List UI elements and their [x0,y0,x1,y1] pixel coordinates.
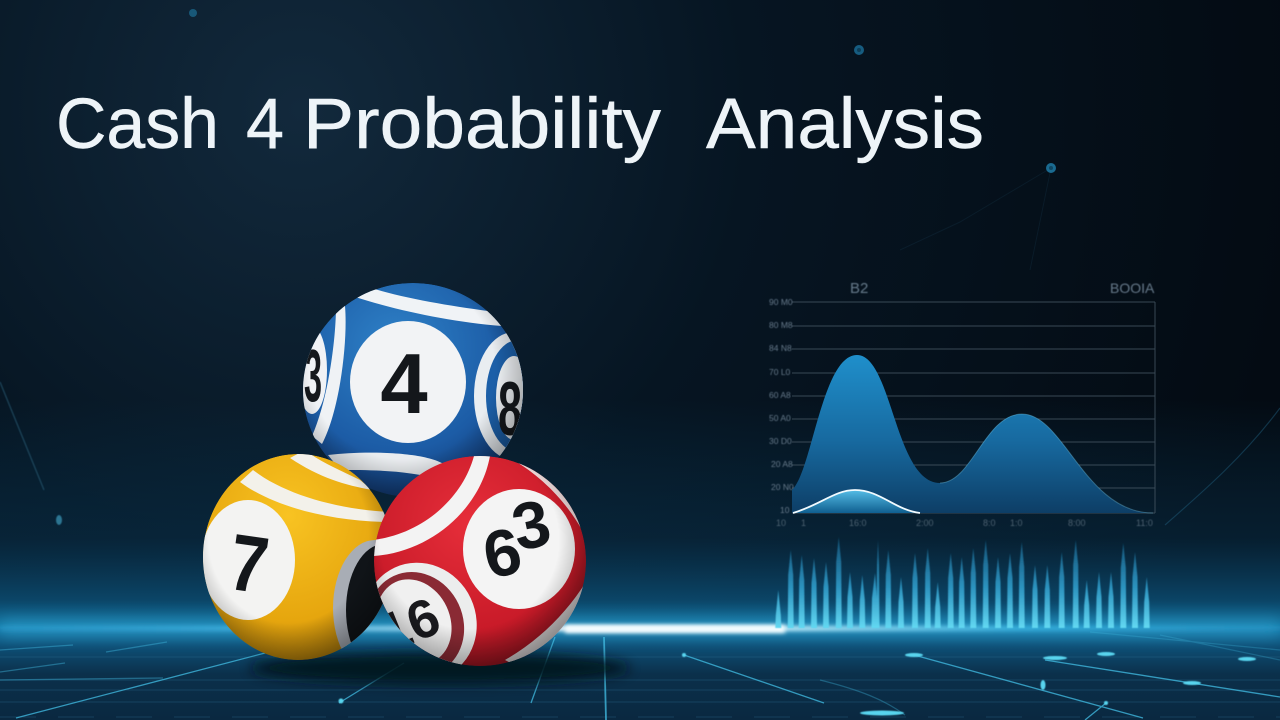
chart x axis labels: 16:0 [849,518,867,528]
title: 4 [246,85,284,164]
chart y axis labels: 70 L0 [769,367,791,377]
second peak highlight [940,414,1153,513]
main distribution area [792,355,1153,513]
floor grid [0,628,1280,720]
top white stripe [357,289,501,326]
left side number disc [303,306,346,444]
chart x axis labels: 11:0 [1136,518,1153,528]
main number disc [350,321,466,443]
dark side disc [333,540,383,648]
ball contact shadow [250,652,630,684]
chart y axis labels [769,297,794,515]
right side number disc: 8 [498,367,522,452]
chart top labels: B2 [850,280,868,297]
title: Analysis [706,85,984,164]
lottery ball: red 63 [374,456,586,666]
chart y axis labels: 80 M8 [769,320,793,330]
chart top labels [850,280,1155,297]
white stripes [240,470,392,522]
chart y axis labels: 50 A0 [769,413,791,423]
lower right stripe [505,586,583,662]
small distribution curve [793,490,920,513]
right side number disc [474,333,523,456]
chart top labels: BOOIA [1110,280,1155,296]
left side number disc: 3 [304,334,322,417]
number 63: 63 [477,485,557,593]
lower left number disc: 16 [370,586,448,664]
title: Probability [303,85,662,164]
chart x axis labels: 1 [801,518,806,528]
chart y axis labels: 84 N8 [769,343,792,353]
title: Cash [56,85,219,164]
horizon glow [0,620,1280,636]
upper right stripe [518,463,580,528]
bottom white band [328,452,442,475]
number 4: 4 [380,337,428,432]
chart: probability area curves [769,280,1155,528]
background network nodes [0,9,1280,525]
chart x axis labels: 10 [776,518,786,528]
chart: spike bars [775,537,1150,628]
chart y axis labels: 90 M0 [769,297,793,307]
chart grid lines [792,302,1155,513]
chart x axis labels: 8:00 [1068,518,1086,528]
chart y axis labels: 60 A8 [769,390,791,400]
chart x axis labels [776,518,1153,528]
curved white stripe [372,456,490,556]
lottery ball: blue 4 [303,283,523,496]
lottery ball: yellow 7 [203,454,385,660]
chart y axis labels: 20 A8 [771,459,793,469]
chart y axis labels: 10 [780,505,790,515]
chart y axis labels: 30 D0 [769,436,792,446]
chart x axis labels: 1:0 [1010,518,1023,528]
number disc [463,489,575,609]
number disc [201,500,295,620]
chart y axis labels: 20 N0 [771,482,794,492]
lower left number disc [376,562,477,664]
chart x axis labels: 8:0 [983,518,996,528]
number 7: 7 [224,517,274,611]
chart x axis labels: 2:00 [916,518,934,528]
